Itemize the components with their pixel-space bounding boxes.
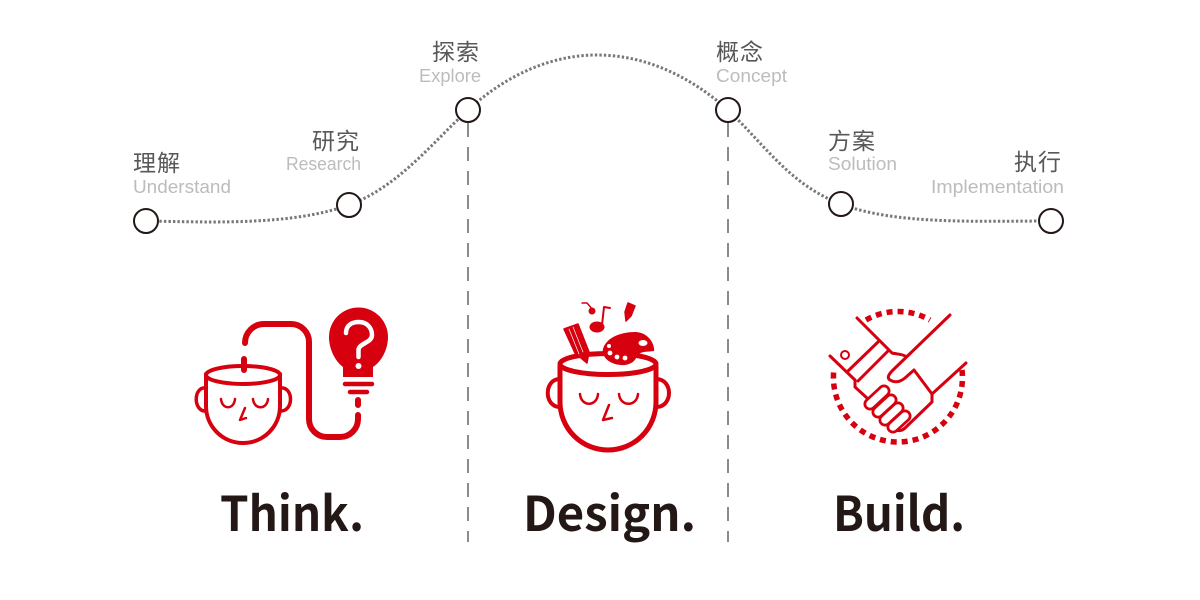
fingers bbox=[870, 391, 905, 427]
left cuff and arm bbox=[830, 318, 905, 381]
label: research: Research bbox=[286, 153, 361, 174]
cable bbox=[245, 324, 358, 437]
ears bbox=[196, 388, 290, 411]
hand palm bbox=[855, 380, 932, 431]
music note head small bbox=[588, 308, 596, 314]
dashed circle lower bbox=[833, 369, 962, 442]
cufflink bbox=[841, 351, 849, 359]
icon: design head with creative tools bbox=[548, 303, 669, 450]
nose bbox=[603, 405, 612, 420]
eyes bbox=[580, 394, 638, 404]
label: solution: 方案 bbox=[828, 128, 876, 154]
node: implementation bbox=[1039, 209, 1063, 233]
heading: think: Think. bbox=[220, 475, 364, 545]
nose bbox=[240, 408, 246, 420]
eyes bbox=[221, 399, 268, 407]
music note head large bbox=[590, 322, 604, 332]
label: concept: Concept bbox=[716, 65, 787, 86]
node: understand bbox=[134, 209, 158, 233]
process curve bbox=[146, 55, 1051, 222]
right arm and thumb bbox=[888, 315, 966, 394]
music note small bbox=[582, 303, 593, 310]
head outline bbox=[560, 366, 656, 450]
right phase divider bbox=[727, 123, 729, 542]
label: explore bbox=[419, 39, 481, 86]
label: research: 研究 bbox=[312, 128, 360, 154]
paint palette bbox=[603, 332, 654, 365]
label: implementation: Implementation bbox=[931, 176, 1064, 197]
label: explore: 探索 bbox=[432, 39, 480, 65]
music note large bbox=[602, 307, 610, 325]
label: solution: Solution bbox=[828, 153, 897, 174]
palette wells bbox=[607, 340, 648, 360]
label: implementation: 执行 bbox=[1014, 149, 1062, 175]
label: implementation bbox=[931, 149, 1064, 197]
label: understand: Understand bbox=[133, 176, 231, 197]
node: solution bbox=[829, 192, 853, 216]
dashed circle upper bbox=[866, 312, 930, 320]
label: solution bbox=[828, 128, 897, 174]
node: explore bbox=[456, 98, 480, 122]
label: explore: Explore bbox=[419, 65, 481, 86]
left phase divider bbox=[467, 123, 469, 542]
bulb base bars bbox=[345, 384, 372, 392]
label: research bbox=[286, 128, 361, 174]
cable stubs bbox=[244, 359, 358, 405]
heading: design: Design. bbox=[523, 475, 696, 545]
icon: build handshake bbox=[830, 312, 966, 442]
head rim bbox=[560, 354, 656, 374]
ears bbox=[548, 379, 669, 407]
node: research bbox=[337, 193, 361, 217]
node: concept bbox=[716, 98, 740, 122]
label: concept bbox=[716, 39, 787, 86]
heading: build: Build. bbox=[833, 475, 965, 545]
question dot bbox=[356, 363, 362, 369]
question mark bbox=[346, 322, 372, 357]
label: understand: 理解 bbox=[133, 150, 181, 176]
pencil bbox=[564, 324, 589, 363]
icon: think head with light bulb bbox=[196, 308, 388, 443]
label: understand bbox=[133, 150, 231, 197]
paint brush bbox=[625, 303, 635, 321]
label: concept: 概念 bbox=[716, 39, 764, 65]
bulb bbox=[329, 308, 388, 377]
head rim bbox=[206, 366, 280, 384]
head outline bbox=[206, 374, 280, 443]
